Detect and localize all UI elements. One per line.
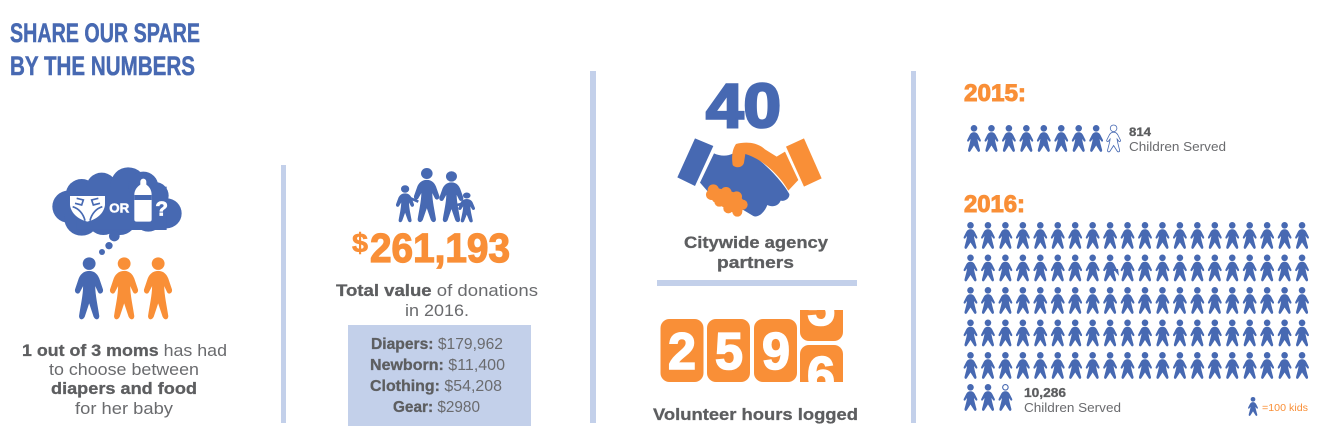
counter: volunteer hours: 5 — [807, 279, 835, 337]
counter: volunteer hours — [660, 310, 843, 382]
text: one out of three moms: diapers and food — [51, 379, 197, 398]
text: total value — [336, 281, 538, 320]
icon: thought cloud with diaper or bottle — [52, 167, 182, 255]
text: 10,286 children served: 10,286 — [1024, 386, 1066, 400]
panel: donations — [336, 168, 538, 426]
icon row: 2015 children — [967, 125, 1120, 276]
text: volunteer hours logged: Volunteer hours logged — [653, 405, 858, 424]
title: BY THE NUMBERS — [10, 51, 195, 81]
icon: handshake — [677, 138, 822, 217]
counter: volunteer hours: 5 — [715, 323, 743, 381]
title: SHARE OUR SPARE — [10, 18, 200, 48]
text: citywide agency partners — [684, 233, 829, 272]
donation breakdown box: Gear: $2980 — [393, 399, 480, 416]
text: 814 children served: Children Served — [1129, 139, 1226, 154]
icon grid: 2016 children — [964, 222, 1309, 411]
number 40: 40 — [706, 72, 781, 141]
donation breakdown box — [348, 325, 531, 426]
heading: 2016: 2016: — [964, 191, 1025, 218]
text: citywide agency partners: Citywide agency — [684, 233, 829, 252]
panel: partners and volunteers — [653, 72, 858, 424]
text: one out of three moms: for her baby — [75, 399, 174, 418]
legend: one icon equals 100 kids — [1248, 397, 1308, 416]
panel: children served — [964, 80, 1309, 416]
title — [10, 18, 200, 81]
panel: moms — [22, 167, 227, 418]
text: one out of three moms: to choose between — [49, 360, 199, 379]
donation breakdown box: Clothing: $54,208 — [370, 378, 502, 395]
text: one out of three moms — [22, 341, 227, 418]
icon: family — [396, 168, 475, 222]
legend: one icon equals 100 kids: =100 kids — [1262, 403, 1308, 414]
text: 10,286 children served — [1024, 386, 1121, 415]
icon: thought cloud with diaper or bottle: ? — [155, 197, 168, 220]
icon: three parents — [75, 257, 172, 319]
donation breakdown box: Newborn: $11,400 — [370, 357, 505, 374]
text: total value: Total value of donations — [336, 281, 538, 300]
counter: volunteer hours: 6 — [807, 347, 835, 405]
text: 10,286 children served: Children Served — [1024, 400, 1121, 415]
text: 814 children served — [1129, 125, 1226, 154]
text: citywide agency partners: partners — [717, 253, 794, 272]
donation total: $ — [352, 228, 368, 258]
heading: 2015: 2015: — [964, 80, 1026, 107]
text: total value: in 2016. — [405, 301, 469, 320]
text: one out of three moms: 1 out of 3 moms has had — [22, 341, 227, 360]
counter: volunteer hours: 2 — [668, 323, 696, 381]
donation total: 261,193 — [370, 225, 510, 271]
donation breakdown box: Diapers: $179,962 — [371, 336, 503, 353]
counter: volunteer hours: 9 — [762, 323, 790, 381]
text: 814 children served: 814 — [1129, 125, 1151, 139]
icon: thought cloud with diaper or bottle: OR — [109, 202, 129, 216]
